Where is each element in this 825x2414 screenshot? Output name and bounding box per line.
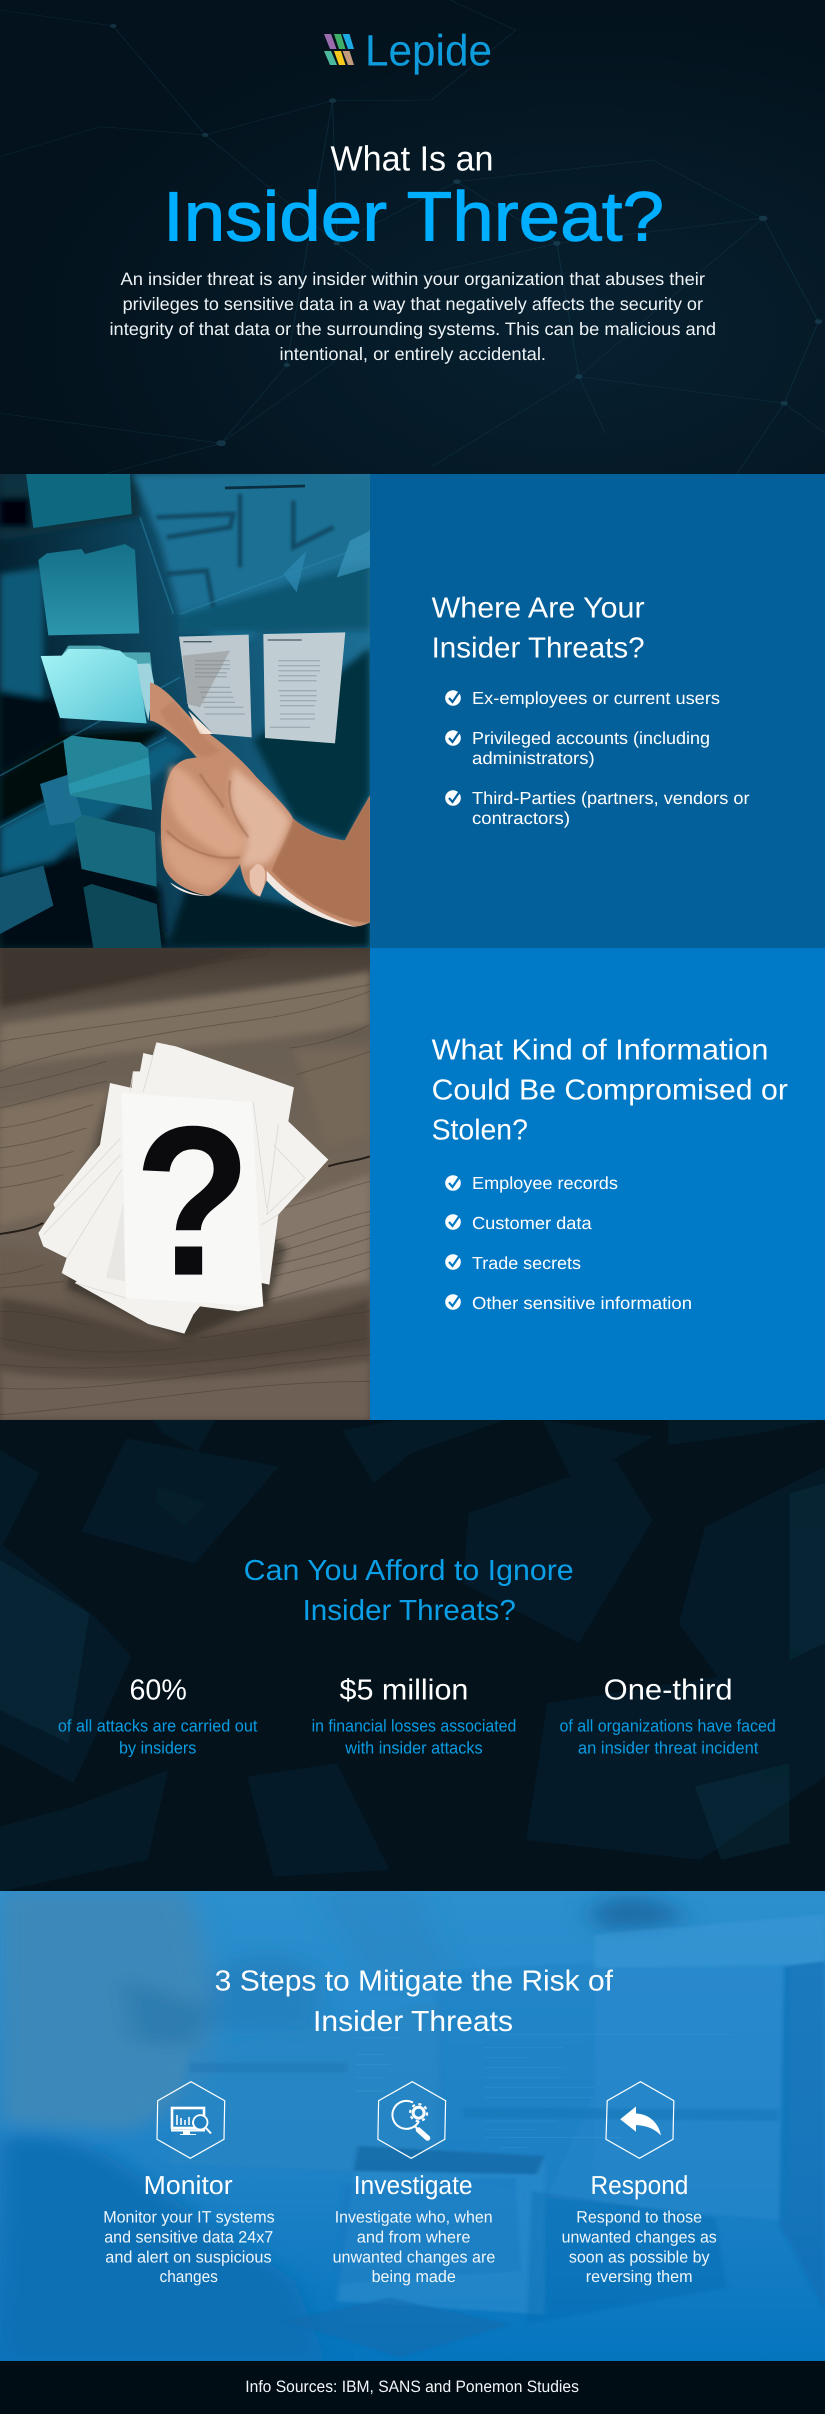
step: investigate: and from where (357, 2228, 470, 2246)
network background (0, 0, 825, 474)
heading: What Kind of Information (432, 1034, 768, 1066)
stat: one-third: an insider threat incident (578, 1738, 759, 1758)
list item: Employee records (472, 1173, 618, 1193)
step: respond: Respond to those (576, 2208, 702, 2226)
heading (244, 1555, 574, 1627)
heading (432, 592, 645, 665)
card stack (38, 1042, 328, 1334)
stat: $5 million: $5 million (340, 1674, 468, 1706)
icon: check (445, 1175, 461, 1191)
icon: check (445, 1254, 461, 1270)
stat: 60% (58, 1674, 258, 1758)
step: investigate: unwanted changes are (333, 2248, 495, 2266)
heading: Insider Threats? (432, 633, 645, 665)
laptop (336, 2168, 548, 2315)
stat: $5 million: in financial losses associated (312, 1717, 516, 1736)
step: respond: unwanted changes as (562, 2228, 717, 2246)
heading: Stolen? (432, 1114, 528, 1146)
heading: 3 Steps to Mitigate the Risk of (215, 1966, 614, 1998)
step: monitor: and sensitive data 24x7 (104, 2228, 273, 2246)
step: respond: Respond (590, 2170, 688, 2200)
step: monitor: changes (160, 2268, 218, 2286)
footer (0, 2361, 825, 2414)
title line one: What Is an (330, 140, 494, 179)
icon: check (445, 730, 461, 746)
panel: what kind of information (0, 948, 825, 1420)
step: investigate: Investigate who, when (335, 2208, 493, 2226)
list item: Customer data (472, 1213, 592, 1233)
list item: Ex-employees or current users (472, 688, 720, 708)
photo: hand touching folders (0, 474, 370, 948)
heading: Could Be Compromised or (432, 1074, 788, 1106)
heading (432, 1034, 788, 1146)
step: monitor (103, 2082, 275, 2286)
blue text panel (370, 948, 825, 1420)
step: respond (562, 2082, 717, 2286)
stat: 60%: of all attacks are carried out (58, 1717, 258, 1736)
list item (445, 728, 710, 768)
icon: check (445, 790, 461, 806)
heading: Can You Afford to Ignore (244, 1555, 574, 1587)
step: monitor: Monitor your IT systems (103, 2208, 275, 2226)
list item: Trade secrets (472, 1253, 581, 1273)
heading: Insider Threats (313, 2006, 513, 2038)
list item: Other sensitive information (472, 1293, 692, 1313)
question mark: ? (134, 1082, 251, 1320)
faceted background (0, 1420, 825, 1892)
icon: investigate hexagon (378, 2082, 446, 2158)
blue text panel (370, 474, 825, 948)
stat: one-third: One-third (604, 1674, 733, 1706)
step: investigate (333, 2082, 495, 2286)
panel: hero (0, 0, 825, 474)
icon: logo stripes (324, 34, 354, 65)
logo (324, 26, 492, 76)
stat: $5 million (312, 1674, 516, 1758)
panel: where are your insider threats (0, 474, 825, 948)
panel: can you afford to ignore (0, 1420, 825, 1892)
document two (263, 632, 345, 743)
icon: monitor hexagon (157, 2082, 225, 2158)
list item: Privileged accounts (including (472, 728, 710, 748)
intro paragraph: An insider threat is any insider within your organization that abuses their (120, 269, 705, 289)
step: investigate: Investigate (354, 2170, 473, 2200)
icon: check (445, 690, 461, 706)
list item (445, 788, 750, 828)
intro paragraph: privileges to sensitive data in a way that negatively affects the security or (123, 294, 703, 314)
heading (215, 1966, 614, 2038)
card stack shadow (67, 1108, 287, 1338)
list item: administrators) (472, 748, 595, 768)
list item: contractors) (472, 808, 570, 828)
footer: Info Sources: IBM, SANS and Ponemon Studies (245, 2378, 579, 2396)
icon: respond hexagon (606, 2082, 674, 2158)
heading: Where Are Your (432, 592, 645, 624)
document one (179, 635, 252, 737)
intro paragraph (110, 269, 716, 364)
step: monitor: and alert on suspicious (105, 2248, 272, 2266)
intro paragraph: intentional, or entirely accidental. (280, 344, 546, 364)
logo wordmark: Lepide (365, 26, 492, 76)
icon: check (445, 1294, 461, 1310)
stat: 60%: by insiders (119, 1738, 196, 1758)
photo: question mark cards on wood (0, 948, 370, 1420)
stat: $5 million: with insider attacks (344, 1738, 483, 1758)
heading: Insider Threats? (303, 1595, 516, 1627)
step: investigate: being made (372, 2268, 456, 2286)
icon: check (445, 1214, 461, 1230)
step: respond: soon as possible by (569, 2248, 710, 2266)
step: monitor: Monitor (144, 2170, 233, 2200)
panel: 3 steps (0, 1891, 825, 2361)
stat: one-third: of all organizations have faced (560, 1717, 776, 1736)
title line two: Insider Threat? (163, 178, 664, 256)
step: respond: reversing them (586, 2268, 693, 2286)
list item: Third-Parties (partners, vendors or (472, 788, 750, 808)
office photo backdrop (0, 1891, 825, 2361)
wood grain (0, 955, 370, 1415)
intro paragraph: integrity of that data or the surrounding systems. This can be malicious and (110, 319, 716, 339)
hand (150, 682, 370, 927)
stat: one-third (560, 1674, 776, 1758)
stat: 60%: 60% (130, 1674, 187, 1706)
